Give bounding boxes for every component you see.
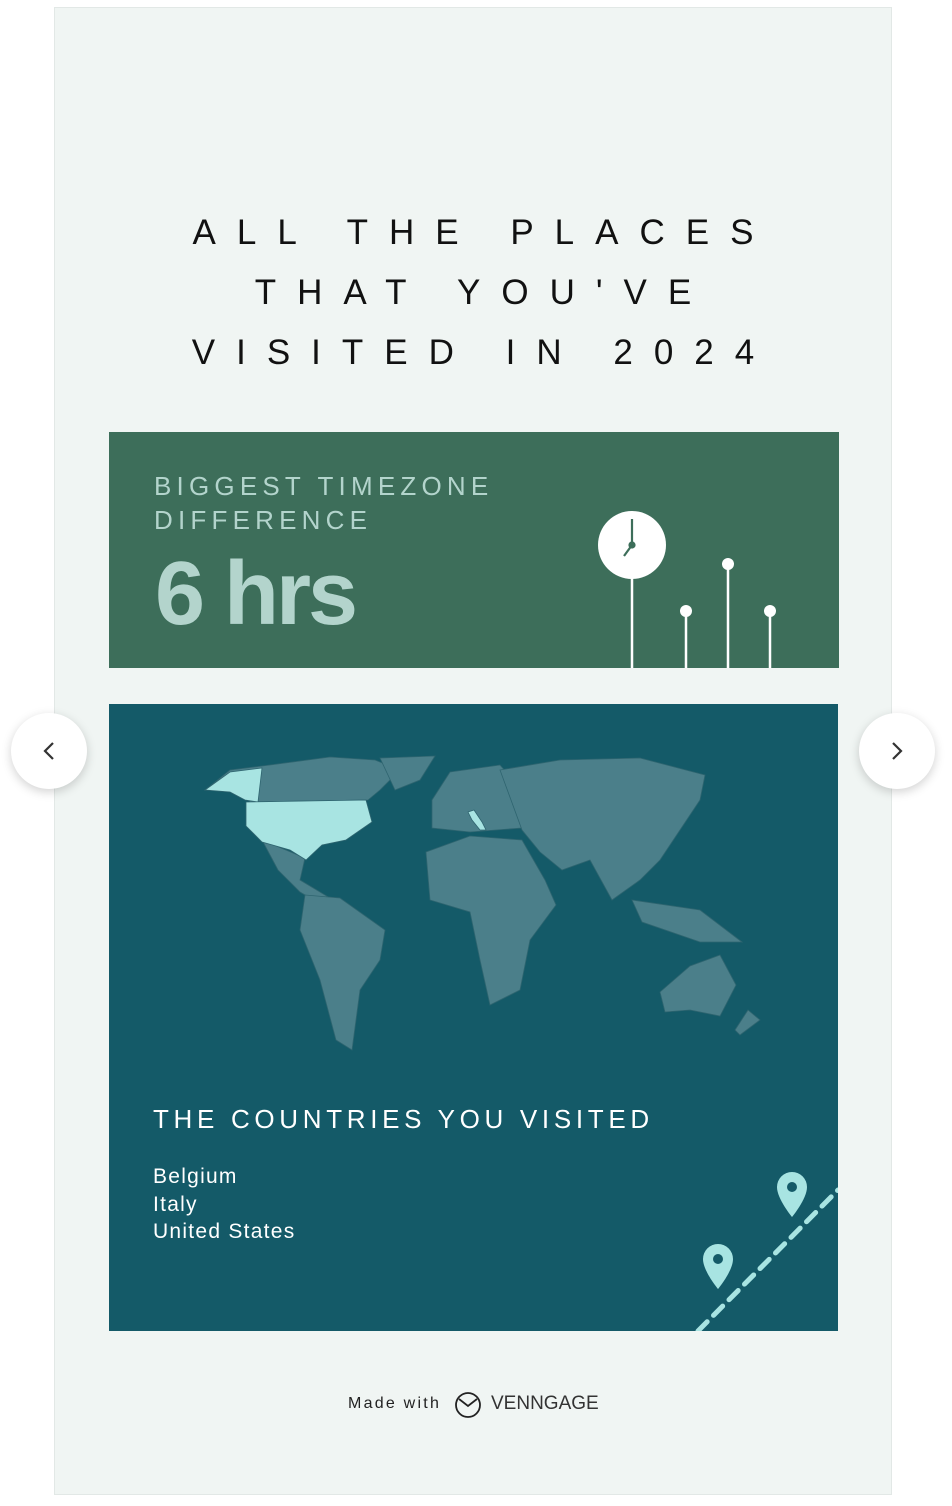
label: biggest timezone difference bbox=[154, 471, 493, 535]
title bbox=[192, 213, 775, 372]
list of countries: United States bbox=[153, 1220, 295, 1243]
footer: made with venngage bbox=[348, 1392, 599, 1418]
footer: made with venngage: Made with bbox=[348, 1395, 441, 1412]
panel: countries map bbox=[109, 704, 838, 1331]
button: previous bbox=[11, 713, 87, 789]
label: biggest timezone difference: BIGGEST TIMEZONE bbox=[154, 471, 493, 501]
title: THAT YOU'VE bbox=[255, 273, 712, 312]
title: VISITED IN 2024 bbox=[192, 333, 775, 372]
list of countries bbox=[153, 1165, 295, 1243]
title: ALL THE PLACES bbox=[193, 213, 774, 252]
visited: Italy bbox=[468, 810, 486, 830]
world map bbox=[204, 756, 760, 1050]
list of countries: Belgium bbox=[153, 1165, 238, 1188]
icon: pins and dashed route bbox=[696, 1172, 838, 1331]
label: biggest timezone difference: DIFFERENCE bbox=[154, 505, 372, 535]
icon: clock with pins bbox=[598, 511, 776, 668]
footer: made with venngage: VENNGAGE bbox=[491, 1393, 599, 1414]
list of countries: Italy bbox=[153, 1192, 198, 1216]
big number: 6 hrs bbox=[155, 544, 355, 644]
button: next bbox=[859, 713, 935, 789]
visited: United States bbox=[205, 768, 486, 860]
panel: timezone bbox=[109, 432, 839, 668]
heading: countries visited: THE COUNTRIES YOU VISITED bbox=[153, 1104, 654, 1134]
